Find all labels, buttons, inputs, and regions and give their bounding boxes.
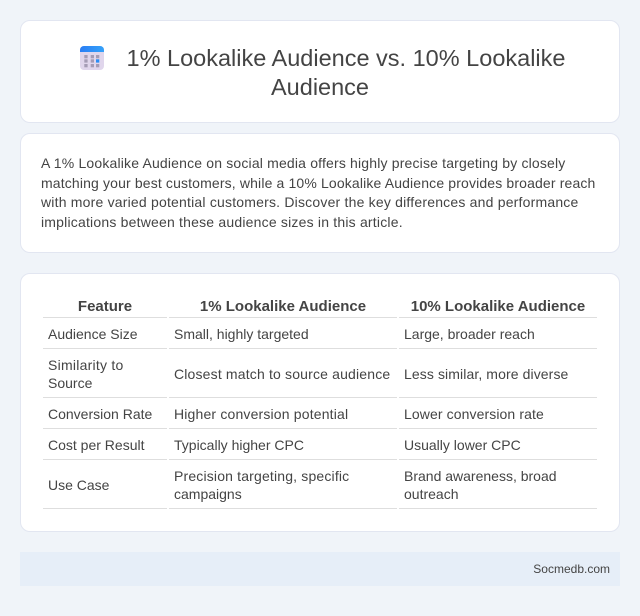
row: similarity: Similarity to (48, 357, 124, 373)
row: cost per result: Cost per Result (48, 437, 144, 453)
row: use case: campaigns (174, 486, 242, 502)
icon: calendar (80, 46, 104, 70)
footer bar (20, 552, 620, 586)
row: similarity: Closest match to source audience (174, 366, 390, 382)
table header: 1% Lookalike Audience (200, 298, 366, 315)
table (43, 298, 597, 509)
title: Audience (271, 74, 369, 100)
intro paragraph (41, 155, 595, 230)
row: similarity: Less similar, more diverse (404, 366, 568, 382)
table header (78, 298, 585, 315)
row: cost per result (48, 437, 521, 453)
row: audience size: Small, highly targeted (174, 326, 309, 342)
row: conversion rate: Lower conversion rate (404, 406, 544, 422)
row: conversion rate: Conversion Rate (48, 406, 152, 422)
intro paragraph: A 1% Lookalike Audience on social media offers highly precise targeting by closely (41, 155, 565, 171)
panel: intro text (20, 133, 620, 253)
panel: title card (20, 20, 620, 123)
intro paragraph: with more varied potential customers. Discover the key differences and performance (41, 194, 578, 210)
table header: 10% Lookalike Audience (411, 298, 585, 315)
row: audience size: Large, broader reach (404, 326, 535, 342)
row: cost per result: Typically higher CPC (174, 437, 304, 453)
title (127, 45, 565, 100)
row: audience size: Audience Size (48, 326, 138, 342)
row: use case: outreach (404, 486, 458, 502)
title: 1% Lookalike Audience vs. 10% Lookalike (127, 45, 565, 71)
row: conversion rate (48, 406, 544, 422)
row: cost per result: Usually lower CPC (404, 437, 521, 453)
footer credit: Socmedb.com (533, 562, 610, 576)
row: similarity: Source (48, 375, 92, 391)
row: use case: Use Case (48, 477, 109, 493)
intro paragraph: implications between these audience sizes in this article. (41, 214, 403, 230)
panel: comparison table (20, 273, 620, 532)
table header: Feature (78, 298, 132, 315)
row: use case (48, 468, 557, 502)
intro paragraph: matching your best customers, while a 10% Lookalike Audience provides broader reach (41, 174, 595, 190)
row: use case: Brand awareness, broad (404, 468, 557, 484)
row: similarity (48, 357, 568, 391)
row: use case: Precision targeting, specific (174, 468, 349, 484)
row: conversion rate: Higher conversion potential (174, 406, 348, 422)
row: audience size (48, 326, 535, 342)
